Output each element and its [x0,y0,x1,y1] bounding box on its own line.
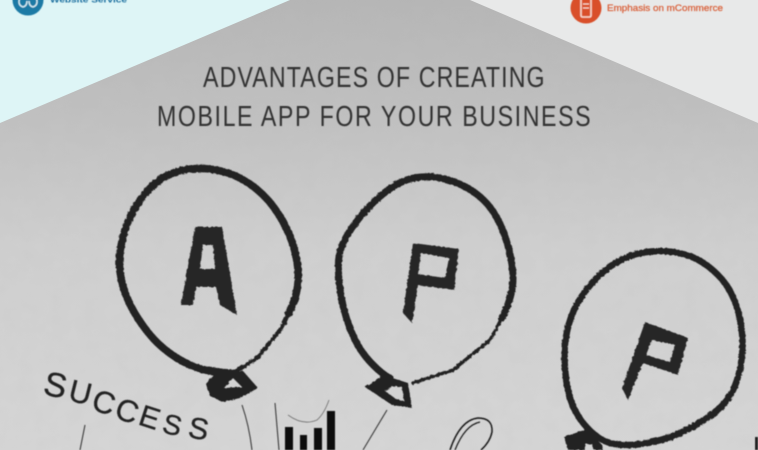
cut-off dark element at right edge [755,437,758,450]
handwritten word: success [40,365,211,447]
balloon: letter P [338,177,513,408]
balloon knot [564,429,603,450]
handwritten word: success: S [160,408,185,442]
icon: orange circle with phone [570,0,602,24]
panel: top-left light blue corner [0,0,290,123]
balloon P thick outline [338,177,513,378]
logo: right orange brand [570,0,723,24]
title: ADVANTAGES OF CREATING [203,60,545,94]
icon: blue circle emblem [12,0,44,16]
logo text: Emphasis on mCommerce [607,3,723,14]
balloon: second letter P [564,251,743,450]
handwritten word: success: S [40,365,70,407]
letter P [403,243,459,323]
balloon strings [80,403,387,450]
handwritten word: success: S [186,411,211,447]
balloon A knot [206,371,258,402]
title: MOBILE APP FOR YOUR BUSINESS [157,99,591,133]
icon: rising bar chart [285,400,335,450]
balloon A thick outline [119,168,298,373]
balloon P knot [365,375,412,408]
trend curve [288,400,329,422]
letter A [181,227,237,315]
handwritten word: success: C [111,391,144,431]
title [157,60,591,133]
balloon: letter A [119,168,298,402]
handwritten word: success: U [65,373,95,412]
letter P [622,322,688,400]
handwritten word: success: E [135,399,164,437]
logo: left blue brand [12,0,127,16]
balloon P thin outline [413,318,502,383]
handwritten word: success: C [88,382,120,423]
balloon A thin outline [233,314,288,373]
panel: top-right light grey corner [470,0,758,123]
balloon outline [564,251,743,445]
icon: magnifying glass [450,418,492,450]
bars [285,411,335,450]
